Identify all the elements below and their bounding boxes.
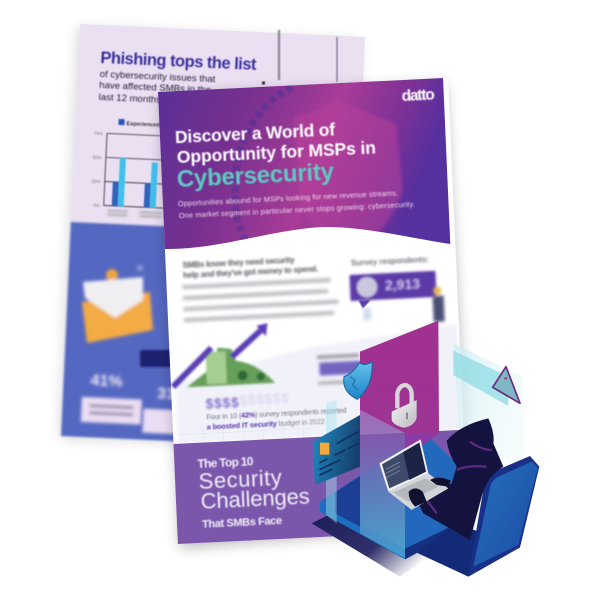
sheet white background	[158, 78, 468, 544]
infographic mockup scene	[55, 24, 540, 577]
bar chart: 75%	[94, 131, 103, 136]
header subtitle: Opportunities abound for MSPs looking for new revenue streams.	[178, 188, 398, 208]
survey respondents callout	[349, 271, 437, 309]
panel: purple header	[158, 78, 451, 267]
bar chart	[90, 131, 195, 219]
header subtitle	[178, 188, 415, 220]
back sheet intro text: have affected SMBs in the	[99, 80, 211, 96]
hacker figure	[415, 418, 503, 540]
alert window	[453, 351, 520, 406]
budget stat dollar row: $$$$$$	[239, 390, 290, 408]
stat 41%	[81, 372, 143, 425]
back sheet heading: Phishing tops the list	[100, 49, 257, 74]
chart legend: Experienced	[126, 121, 160, 129]
stat 31%: 31%	[157, 385, 190, 404]
budget stat dollar row: $$$$	[205, 395, 240, 411]
year stat block	[317, 354, 362, 385]
laptop	[379, 439, 448, 510]
banner text	[197, 451, 311, 531]
survey intro heading: SMBs know they need security	[182, 256, 295, 270]
icon: cracked shield	[344, 362, 372, 399]
datto logo: datto	[401, 86, 435, 105]
banner: top 10 challenges	[173, 430, 468, 544]
header subtitle: One market segment in particular never stops growing: cybersecurity.	[179, 200, 415, 220]
navy tag	[140, 350, 174, 367]
survey intro heading: help and they've got money to spend.	[183, 265, 318, 280]
lower lavender section	[174, 324, 461, 444]
hacker hands	[409, 478, 451, 507]
survey intro body	[183, 278, 339, 322]
icon: warning triangle	[493, 367, 520, 403]
hood highlights	[427, 442, 492, 513]
faint grid	[178, 420, 313, 444]
growth arrow with money	[170, 323, 275, 388]
budget stat text: Four in 10 (42%) survey respondents reported	[206, 405, 347, 421]
header shield watermark	[294, 102, 404, 232]
title: Discover a World of	[175, 119, 336, 147]
banner text: That SMBs Face	[202, 515, 282, 531]
desk	[320, 433, 457, 559]
header dotted ring	[231, 86, 294, 240]
banner text: The Top 10	[197, 454, 254, 471]
survey intro heading	[182, 255, 318, 280]
panel: magenta security wall	[360, 321, 439, 558]
back sheet intro text: last 12 months	[98, 92, 161, 106]
back sheet shadow	[60, 28, 360, 445]
budget stat dollar row	[205, 390, 290, 411]
phishing hook line	[151, 224, 153, 268]
icon: padlock	[392, 385, 417, 428]
figure under callout	[363, 308, 371, 320]
chair	[417, 456, 539, 577]
survey respondents heading: Survey respondents:	[351, 255, 429, 268]
title: Cybersecurity	[176, 159, 335, 193]
budget stat text: a boosted IT security budget in 2022	[207, 417, 325, 431]
title: Opportunity for MSPs in	[176, 137, 376, 167]
back sheet intro text	[98, 69, 216, 108]
back sheet lilac panel	[71, 24, 365, 237]
front infographic sheet	[158, 78, 468, 544]
front sheet shadow	[160, 84, 470, 548]
back sheet blue panel	[61, 222, 361, 449]
stat 41%: 41%	[90, 372, 123, 391]
banner text: Challenges	[200, 483, 310, 514]
back infographic sheet	[61, 24, 370, 449]
budget stat text	[206, 405, 347, 431]
floor shadow	[312, 515, 440, 577]
bar chart: 0%	[93, 203, 100, 208]
icon: envelope with hook	[82, 265, 153, 343]
chart legend	[118, 119, 161, 129]
illustration: hacker at desk	[312, 321, 539, 577]
title	[175, 117, 377, 193]
back sheet intro text: of cybersecurity issues that	[99, 69, 216, 85]
icon: credit card	[313, 415, 360, 485]
stat 31%	[142, 385, 190, 435]
survey respondents callout: 2,913	[385, 276, 421, 293]
vertical lines with hook	[262, 30, 337, 83]
bar chart: 50%	[93, 155, 102, 160]
figure beside callout	[432, 286, 445, 322]
faint glass panel	[453, 343, 523, 467]
glass strip	[326, 400, 337, 523]
bar chart: 25%	[91, 179, 101, 184]
banner text: Security	[198, 465, 282, 494]
